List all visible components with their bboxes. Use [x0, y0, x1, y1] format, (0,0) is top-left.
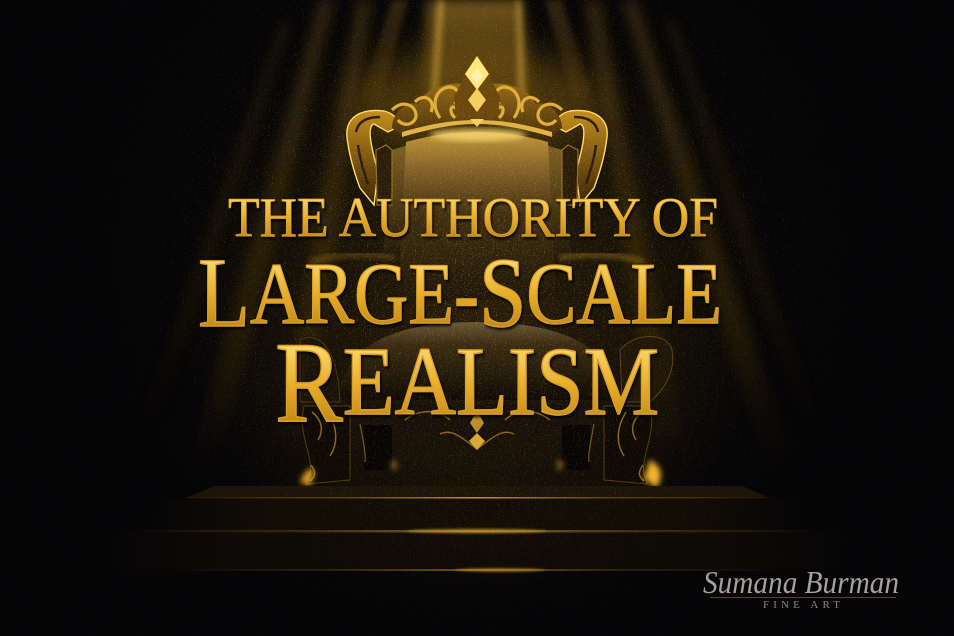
signature rule: [710, 597, 896, 598]
crest centre: [454, 56, 500, 127]
right arm support: [620, 336, 673, 402]
left arm support: [300, 338, 340, 402]
stepped floor: [100, 486, 855, 572]
foot glows: [300, 460, 661, 488]
right wing and crest half: [477, 84, 607, 205]
title: [198, 187, 722, 447]
title line 2: S: [479, 237, 526, 348]
signature name: Sumana Burman: [703, 564, 899, 600]
throne chair: [300, 50, 673, 488]
left legs: [302, 406, 392, 484]
title line 2: ARGE-: [250, 246, 479, 343]
left wing and crest half: [347, 84, 477, 205]
title line 3: EALISM: [343, 328, 659, 435]
right armrest glint: [559, 255, 644, 262]
signature subtitle: FINE ART: [763, 599, 840, 611]
seat cushion: [338, 322, 620, 400]
apron ornament: [405, 411, 550, 450]
title line 3: R: [275, 319, 343, 447]
title line 2: L: [198, 237, 250, 348]
seat apron: [305, 404, 650, 452]
light rays: [130, 0, 830, 480]
title line 1: THE AUTHORITY OF: [228, 187, 718, 249]
chair halo: [352, 50, 602, 160]
left armrest glint: [310, 255, 395, 262]
title line 2: CALE: [526, 246, 722, 343]
upholstery highlight: [430, 129, 526, 141]
chair back upholstery: [379, 136, 575, 300]
right legs: [562, 406, 652, 484]
signature logo: [703, 564, 899, 611]
gold dust: [101, 0, 854, 626]
central tufted panel: [398, 132, 556, 300]
